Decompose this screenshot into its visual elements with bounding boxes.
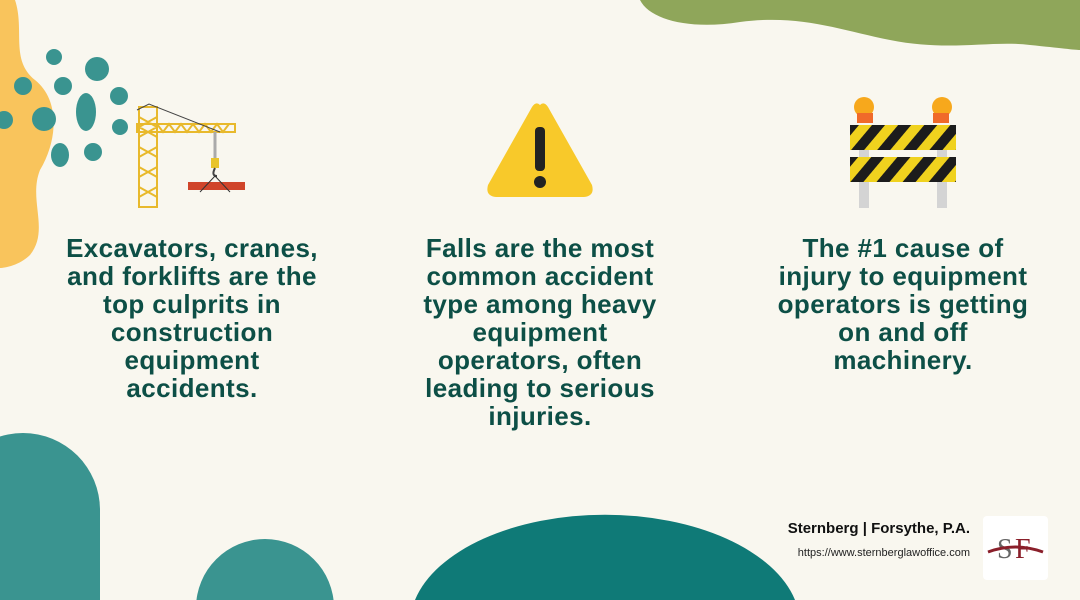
text: excavators: Excavators, cranes, xyxy=(66,233,318,263)
text: falls: common accident xyxy=(426,261,654,291)
footer: firm name and url xyxy=(788,520,970,559)
text: falls: operators, often xyxy=(438,345,642,375)
text: #1 cause: injury to equipment xyxy=(779,261,1027,291)
logo xyxy=(983,516,1048,580)
text: falls: type among heavy xyxy=(423,289,657,319)
text: falls: injuries. xyxy=(488,401,592,431)
text: excavators: equipment xyxy=(124,345,260,375)
decorative dots xyxy=(0,49,128,167)
logo: S xyxy=(997,534,1013,565)
icon: crane xyxy=(136,104,245,208)
footer: firm name and url: https://www.sternberglawoffice.com xyxy=(798,547,970,559)
text: falls xyxy=(423,233,657,431)
text: falls: leading to serious xyxy=(425,373,655,403)
icon: warning sign xyxy=(487,103,593,197)
text: #1 cause: on and off xyxy=(838,317,968,347)
text: excavators: and forklifts are the xyxy=(67,261,317,291)
footer: firm name and url: Sternberg | Forsythe, P.A. xyxy=(788,520,970,537)
text: #1 cause: operators is getting xyxy=(778,289,1028,319)
text: #1 cause: The #1 cause of xyxy=(802,233,1004,263)
logo: F xyxy=(1015,534,1031,565)
icon: barricade xyxy=(850,97,956,208)
decorative blob: yellow left xyxy=(0,0,54,268)
decorative blob: green top right xyxy=(640,0,1080,50)
text: falls: equipment xyxy=(472,317,608,347)
text: falls: Falls are the most xyxy=(426,233,654,263)
text: #1 cause xyxy=(778,233,1028,375)
text: excavators xyxy=(66,233,318,403)
text: excavators: construction xyxy=(111,317,273,347)
text: excavators: top culprits in xyxy=(103,289,281,319)
text: excavators: accidents. xyxy=(126,373,258,403)
text: #1 cause: machinery. xyxy=(833,345,973,375)
